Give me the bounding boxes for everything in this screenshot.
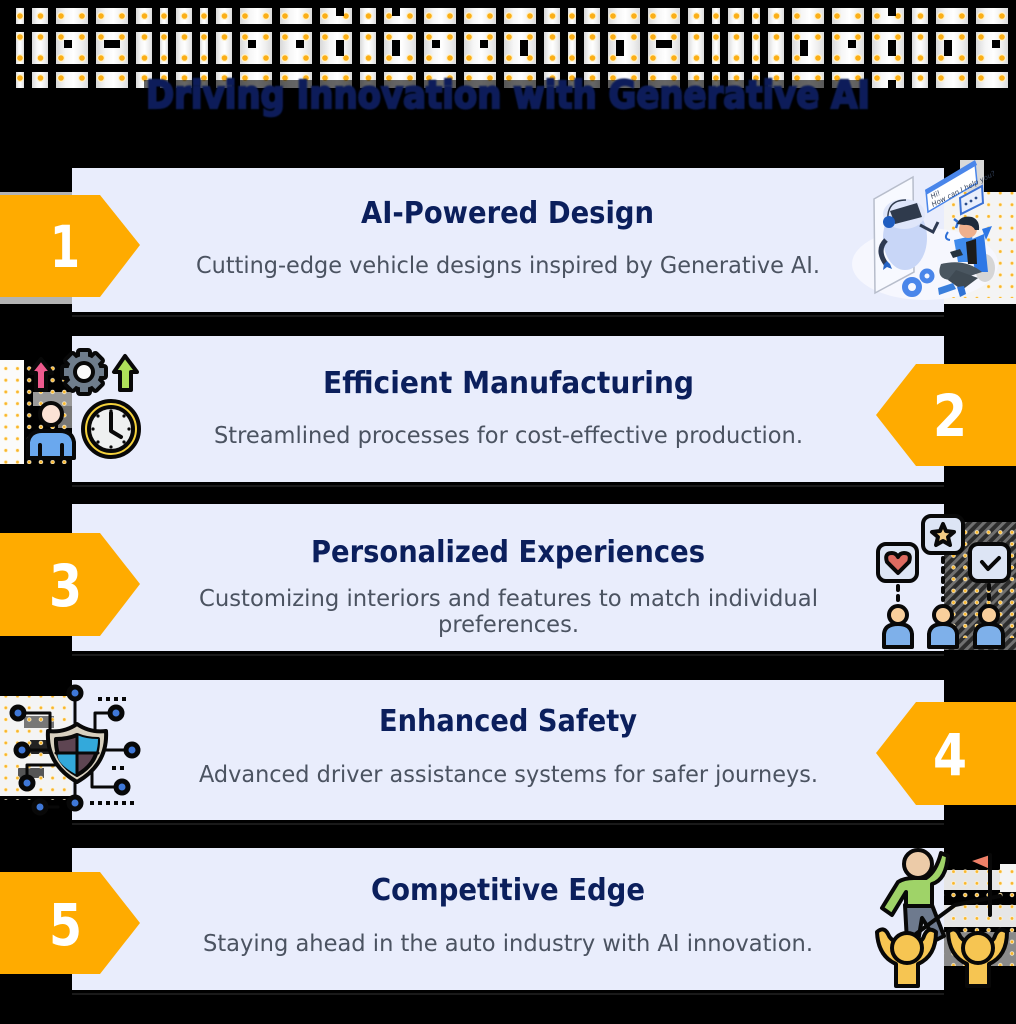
- panel 4: Enhanced Safety: Advanced driver assistance systems for safer journeys.: [199, 762, 818, 788]
- icon: robot and person illustration: How can I help you?: [930, 170, 997, 209]
- number badge 5: 5: [49, 891, 82, 959]
- number badge 1: [0, 192, 140, 304]
- panel 1: AI-Powered Design: AI-Powered Design: [361, 196, 654, 231]
- panel 3: Personalized Experiences: preferences.: [438, 612, 579, 638]
- panel 5: Competitive Edge: Competitive Edge: [371, 873, 645, 908]
- panel 2: Efficient Manufacturing: Efficient Manufacturing: [323, 366, 694, 401]
- panel 1: AI-Powered Design: [0, 160, 998, 317]
- icon background dot patches: [0, 160, 1016, 966]
- panel 3: Personalized Experiences: [0, 504, 1009, 656]
- icon: climber with flag on supporters: [877, 850, 1007, 986]
- decorative dotted tile band: [16, 8, 1008, 88]
- number badge 2: [876, 364, 1016, 466]
- panel 5: Competitive Edge: [0, 848, 1007, 995]
- panel 3: Personalized Experiences: Personalized Experiences: [311, 535, 705, 570]
- number badge 4: 4: [933, 721, 967, 789]
- icon: security shield with circuit nodes: [12, 687, 138, 813]
- number badge 3: 3: [49, 552, 82, 620]
- icon: preference bubbles and three people: [878, 516, 1009, 647]
- panel 4: Enhanced Safety: [12, 680, 1016, 825]
- number badge 2: 2: [933, 382, 967, 450]
- icon: robot and person illustration: [852, 160, 998, 300]
- number badge 3: [0, 533, 140, 636]
- panel 3: Personalized Experiences: Customizing interiors and features to match individual: [199, 586, 818, 612]
- panel 4: Enhanced Safety: Enhanced Safety: [379, 704, 637, 739]
- panel 1: AI-Powered Design: Cutting-edge vehicle designs inspired by Generative AI.: [196, 253, 820, 279]
- number badge 4: [876, 702, 1016, 805]
- panel 5: Competitive Edge: Staying ahead in the auto industry with AI innovation.: [203, 931, 813, 957]
- number badge 5: [0, 872, 140, 974]
- panel 2: Efficient Manufacturing: [28, 336, 1016, 487]
- icon: manufacturing team, gear, clock: [28, 350, 139, 458]
- icon: robot and person illustration: Hi!: [929, 189, 942, 201]
- number badge 1: 1: [50, 213, 80, 281]
- panel 2: Efficient Manufacturing: Streamlined processes for cost-effective production.: [214, 423, 803, 449]
- title: Driving Innovation with Generative AI: [146, 73, 870, 117]
